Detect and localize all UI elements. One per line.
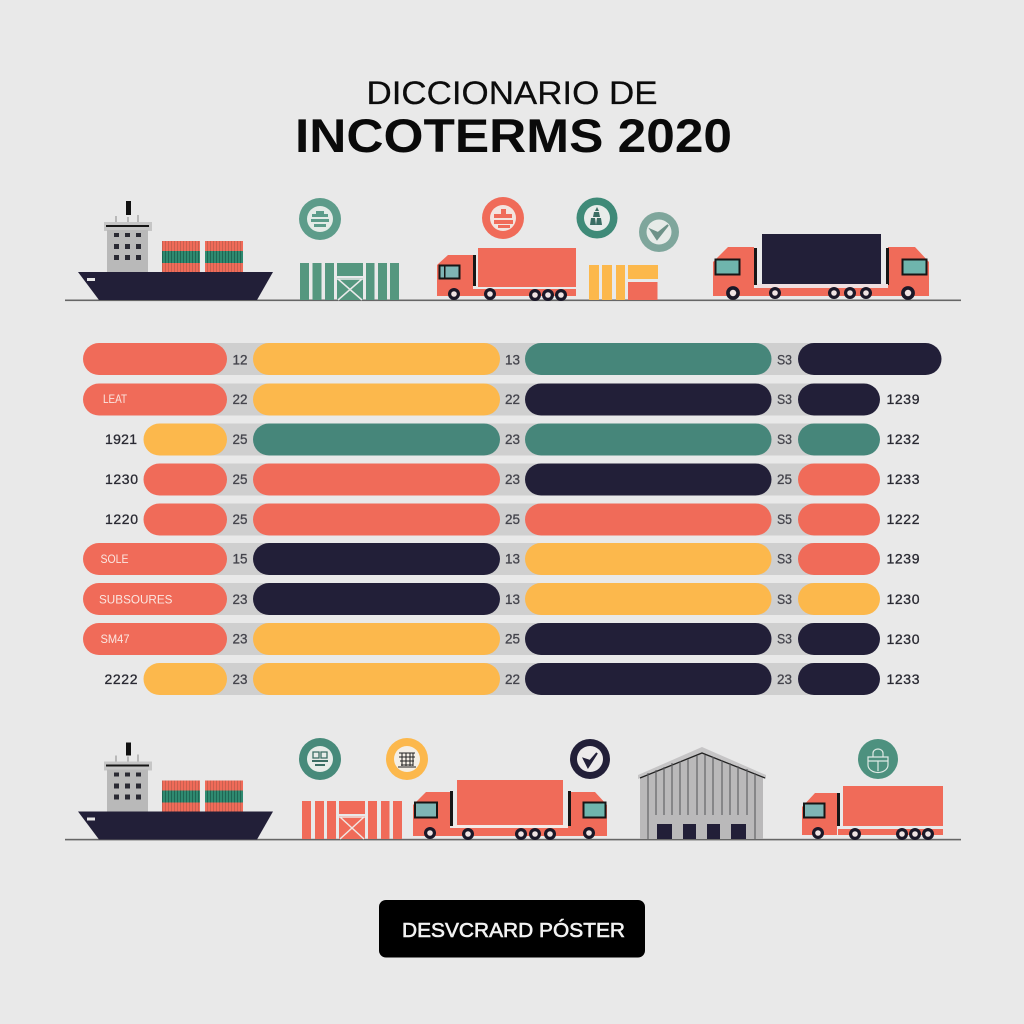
row 9: [104, 663, 920, 695]
row 8: [83, 623, 920, 655]
row 9: 23: [232, 671, 248, 687]
row 2: 1239: [886, 391, 920, 407]
row 5: 25: [505, 511, 520, 527]
row 4: 23: [505, 471, 520, 487]
row 5: 1220: [105, 511, 138, 527]
icon: warehouse: [638, 747, 766, 839]
top transport scene: [65, 197, 961, 301]
row 7: 13: [505, 591, 520, 607]
row 7: [83, 583, 920, 615]
row 1: [83, 343, 942, 375]
row 4: [105, 464, 920, 496]
row 4: 25: [777, 471, 792, 487]
row 2: S3: [777, 391, 792, 407]
download button: [379, 900, 645, 958]
row 3: S3: [777, 431, 792, 447]
row 7: SUBSOURES: [99, 592, 172, 606]
row 5: 25: [232, 511, 248, 527]
row 8: 25: [505, 630, 520, 646]
row 9: 23: [777, 671, 792, 687]
row 6: 15: [232, 550, 248, 566]
icon: coral container: [302, 801, 402, 839]
icon: yellow and coral boxes: [589, 265, 658, 300]
row 3: 1232: [886, 431, 920, 447]
row 6: S3: [777, 550, 792, 566]
row 4: 1230: [105, 471, 138, 487]
row 8: S3: [777, 630, 792, 646]
icon: green bag badge: [858, 739, 898, 779]
row 7: 1230: [886, 591, 920, 607]
icon: green badge: [299, 198, 341, 240]
icon: green badge with boxes: [576, 198, 618, 238]
row 7: 23: [232, 591, 248, 607]
row 9: 22: [505, 671, 520, 687]
icon: container ship: [78, 201, 273, 300]
row 5: S5: [777, 511, 792, 527]
row 3: 23: [505, 431, 520, 447]
title line 1: DICCIONARIO DE: [366, 75, 658, 111]
row 5: [105, 504, 920, 536]
row 9: 1233: [886, 671, 920, 687]
icon: coral badge: [482, 197, 524, 239]
row 1: 13: [505, 352, 520, 368]
icon: green container: [300, 263, 399, 300]
row 4: 25: [232, 471, 248, 487]
icon: navy check badge: [570, 739, 610, 779]
row 6: 13: [505, 550, 520, 566]
row 3: 25: [232, 431, 248, 447]
row 8: 1230: [886, 631, 920, 647]
row 2: LEAT: [103, 392, 128, 406]
icon: yellow badge: [386, 738, 428, 780]
row 6: [83, 543, 920, 575]
button label: DESVCRARD PÓSTER: [402, 919, 625, 942]
row 7: S3: [777, 591, 792, 607]
icon: coral truck: [802, 786, 943, 840]
row 9: 2222: [104, 671, 138, 687]
icon: container ship: [78, 742, 273, 840]
row 8: 23: [232, 630, 248, 646]
icon: green badge: [299, 738, 341, 780]
row 1: S3: [777, 352, 792, 368]
row 3: [105, 424, 920, 456]
bottom transport scene: [65, 738, 961, 840]
title line 2: INCOTERMS 2020: [295, 109, 732, 162]
icon: navy double-cab truck: [713, 234, 929, 300]
row 2: [83, 384, 920, 416]
icon: coral truck with two cabs: [413, 780, 607, 840]
row 6: SOLE: [100, 552, 128, 566]
row 3: 1921: [105, 431, 137, 447]
title: [295, 75, 732, 162]
incoterms bar table: [83, 343, 942, 695]
row 5: 1222: [886, 511, 920, 527]
icon: coral truck: [437, 248, 576, 301]
row 2: 22: [232, 391, 248, 407]
row 2: 22: [505, 391, 520, 407]
row 8: SM47: [100, 632, 130, 646]
icon: check badge: [639, 212, 679, 252]
row 1: 12: [232, 352, 248, 368]
row 6: 1239: [886, 550, 920, 566]
row 4: 1233: [886, 471, 920, 487]
